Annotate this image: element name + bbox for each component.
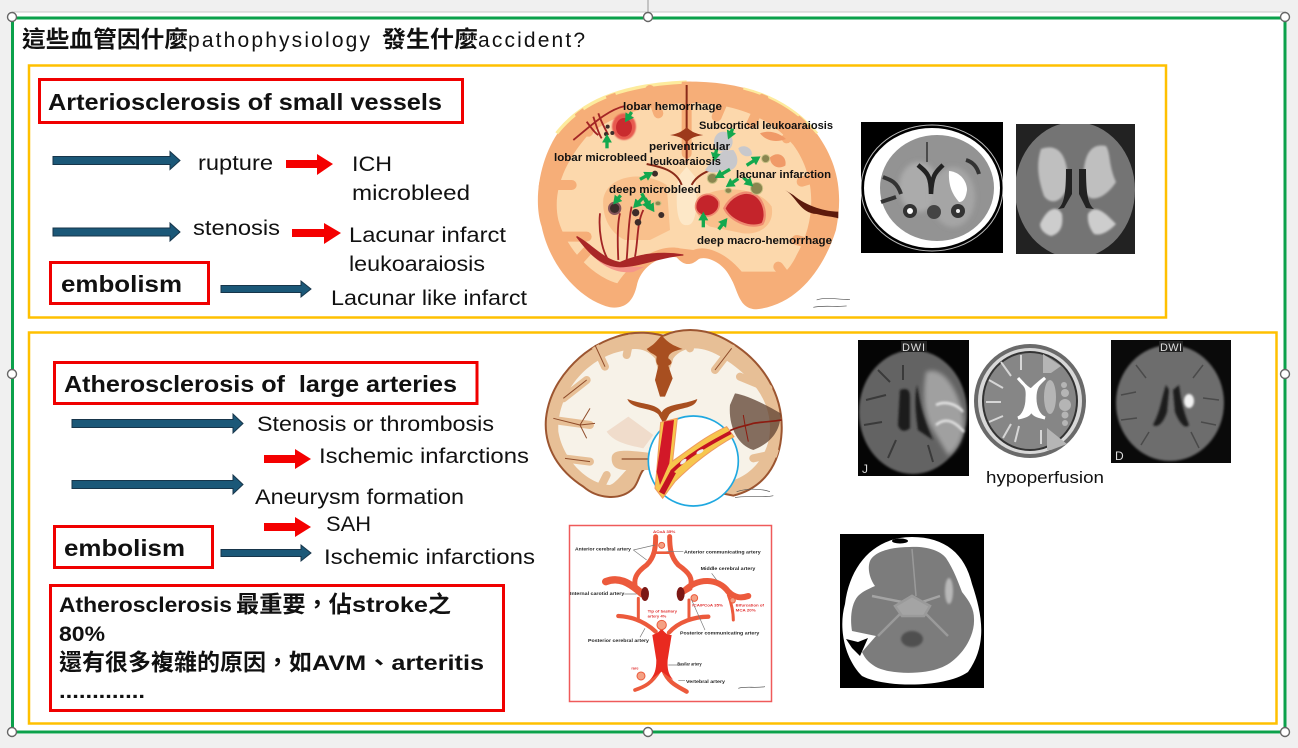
panel: arteriosclerosis of small vessels [29,66,1166,318]
diagram: small vessel brain lesions: Subcortical leukoaraiosis [699,120,833,132]
label: stenosis: stenosis [193,217,280,240]
diagram: small vessel brain lesions: deep macro-hemorrhage [697,235,832,247]
diagram: small vessel brain lesions: deep microbleed [609,184,701,196]
diagram: circle of Willis [570,526,772,702]
label: rupture: rupture [198,152,273,175]
text: SAH: SAH [326,513,371,536]
red arrow: rupture outcome [286,154,333,175]
text: aneurysm formation: Aneurysm formation [255,486,464,509]
green pointers [607,112,755,229]
diagram: circle of Willis: artery 4% [648,614,667,618]
text: leukoaraiosis: leukoaraiosis [349,253,485,276]
callout: atherosclerosis share: Atherosclerosis [59,594,232,617]
red arrow: stenosis outcome [292,223,341,244]
image: CT with basal ganglia hemorrhage [861,122,1003,253]
heading: atherosclerosis: Atherosclerosis of large arteries [64,371,457,397]
diagram: circle of Willis: Posterior cerebral artery [588,638,650,643]
diagram: circle of Willis: ACoA 35% [653,530,676,534]
label: hypoperfusion: hypoperfusion [986,468,1104,487]
red arrow: infarction [264,449,311,469]
callout: atherosclerosis share: stroke [352,594,428,617]
arrow: embolism outcome [221,545,311,561]
text: ischemic infarctions: Ischemic infarctions [324,546,535,569]
image: DWI J watershed infarct [858,340,969,476]
image: T2 hypoperfusion schematic [974,344,1086,458]
diagram: circle of Willis: Anterior communicating artery [684,550,761,555]
diagram: small vessel brain lesions: leukoaraiosis [650,156,721,168]
red arrow: SAH [264,517,311,537]
diagram: circle of Willis: rare [631,667,639,671]
text: ischemic infarctions: Ischemic infarctions [319,445,529,468]
diagram: circle of Willis: Posterior communicating artery [680,630,760,635]
leukoaraiosis patches [705,132,752,172]
heading: atherosclerosis [54,362,477,404]
diagram: circle of Willis: Internal carotid artery [570,591,625,596]
text: microbleed: microbleed [352,182,470,205]
text: lacunar like infarct: Lacunar like infarct [331,287,527,310]
diagram: circle of Willis: MCA 20% [736,609,756,613]
title: 發生什麼 [382,26,478,52]
diagram: circle of Willis: Middle cerebral artery [701,566,756,571]
magnifier circle: thrombosed artery [648,416,738,506]
diagram: small vessel brain lesions: periventricular [649,141,731,153]
image: DWI J watershed infarct: J [862,462,868,476]
text: stenosis or thrombosis: Stenosis or thrombosis [257,413,494,436]
diagram: small vessel brain lesions: lobar hemorrhage [623,101,722,113]
arrow: embolism outcome [221,281,311,297]
panel: atherosclerosis of large arteries [29,330,1276,724]
diagram: small vessel brain lesions: lobar microbleed [554,152,647,164]
perforating and leptomeningeal vessels [573,106,643,260]
image: FLAIR with leukoaraiosis [1016,124,1135,254]
arrow: to rupture [53,152,180,170]
image: CT subarachnoid hemorrhage [840,534,984,688]
diagram: circle of Willis: Basilar artery [677,661,702,666]
embolism box: embolism [61,271,182,297]
callout: atherosclerosis share: 之 [428,591,451,617]
arrow: to stenosis [53,223,180,241]
callout: atherosclerosis share: 80% [59,623,105,646]
heading: arteriosclerosis: Arteriosclerosis of small vessels [48,89,442,115]
title [22,26,585,52]
title: 這些血管因什麼 [22,26,188,52]
title: accident? [478,29,585,52]
image: DWI D small infarct: D [1115,449,1124,463]
diagram: circle of Willis: Tip of basilary [648,610,678,614]
callout: atherosclerosis share: 還有很多複雜的原因 [59,649,266,675]
diagram: circle of Willis: Anterior cerebral artery [575,547,632,552]
image: DWI D small infarct [1111,340,1231,463]
diagram: circle of Willis: ICA/PCoA 35% [692,603,724,607]
arrow: to stenosis or thrombosis [72,414,243,433]
callout: atherosclerosis share: 最重要，佔 [236,591,352,617]
diagram: brain with occluded artery [546,330,782,506]
text: ICH: ICH [352,153,392,176]
image: DWI J watershed infarct: DWI [902,342,925,354]
embolism box [50,262,208,304]
image: DWI D small infarct: DWI [1160,342,1182,354]
callout: atherosclerosis share: ，如 [266,649,312,675]
heading: arteriosclerosis [40,80,462,122]
title: pathophysiology [188,29,370,52]
arrow: to aneurysm formation [72,475,243,494]
ischemic territory [730,393,781,450]
callout: atherosclerosis share: AVM、arteritis [312,652,484,675]
cortical folds [543,83,830,287]
diagram: circle of Willis: Vertebral artery [686,679,726,684]
text: lacunar infarct: Lacunar infarct [349,224,506,247]
diagram: small vessel brain lesions: lacunar infarction [736,169,831,181]
lateral ventricle and falx [647,85,718,185]
diagram: small vessel brain lesions [538,82,850,309]
hemorrhage lesions [612,113,765,226]
embolism box [54,526,212,568]
embolism box: embolism [64,535,185,561]
microbleeds [604,125,664,226]
lacunes [655,155,770,206]
callout: atherosclerosis share: ............. [59,680,145,703]
diagram: circle of Willis: Bifurcation of [736,604,765,608]
callout: atherosclerosis share [50,586,504,710]
